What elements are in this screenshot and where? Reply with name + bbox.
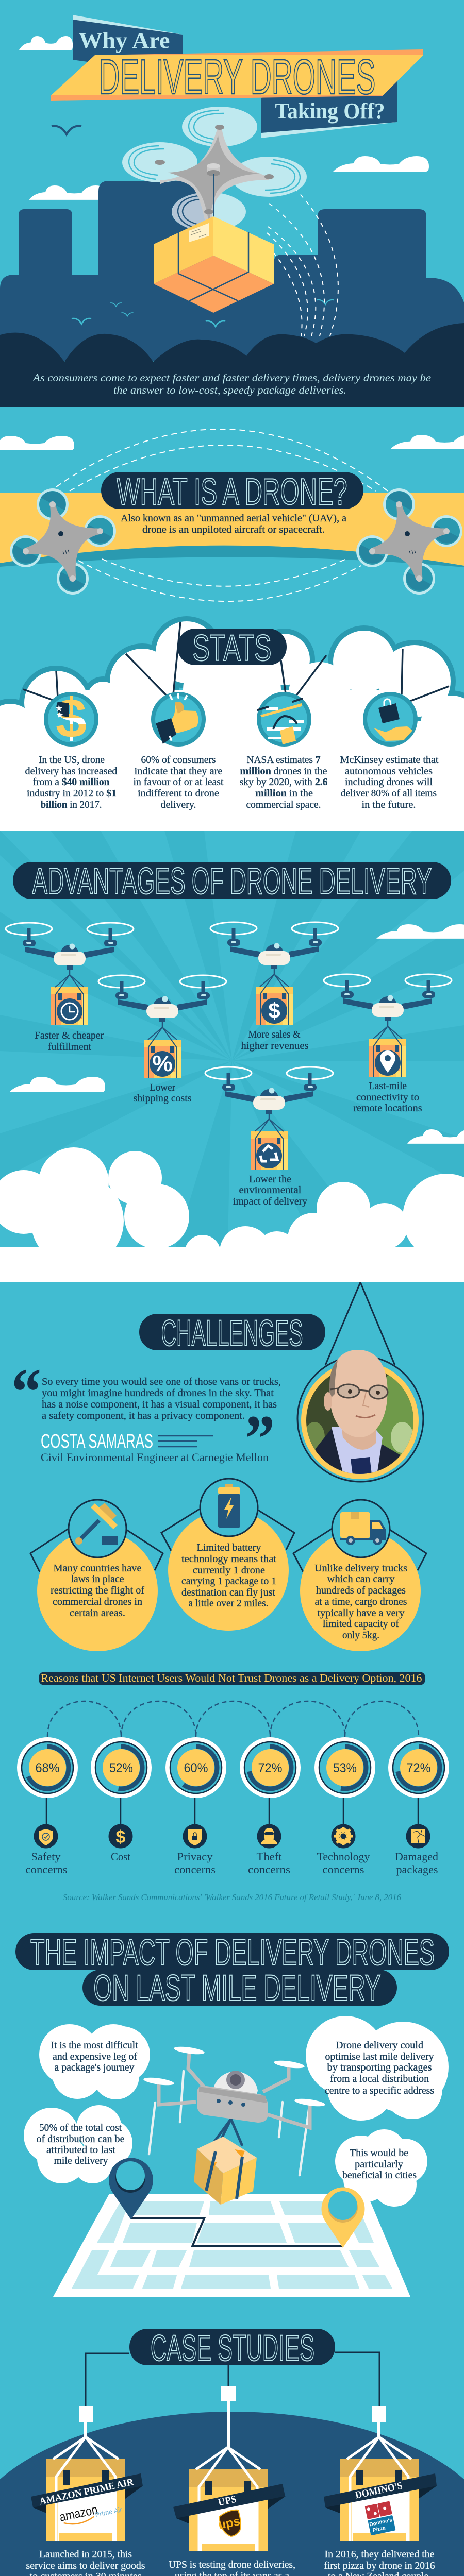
icon: hand with bag bbox=[363, 692, 418, 747]
text: stat 3 bbox=[239, 754, 328, 810]
challenge: laws: certain areas. bbox=[70, 1607, 125, 1619]
label: theft: Theft bbox=[257, 1850, 281, 1863]
text: stat 3: sky by 2020, with 2.6 bbox=[239, 776, 328, 788]
label: damaged bbox=[395, 1850, 438, 1876]
cloud bbox=[9, 1077, 105, 1092]
challenge: battery: Limited battery bbox=[197, 1542, 261, 1553]
birds bbox=[72, 300, 334, 327]
donut: cost 52% bbox=[91, 1737, 152, 1798]
text: stat 1 bbox=[25, 754, 118, 810]
icon: safety shield bbox=[34, 1824, 58, 1849]
text: stat 1: from a $40 million bbox=[33, 776, 109, 788]
case: dominos: DOMINO'S bbox=[354, 2480, 404, 2501]
challenge: laws: Many countries have bbox=[54, 1563, 142, 1574]
cloud bbox=[0, 436, 74, 450]
map bbox=[53, 2194, 410, 2297]
label: environmental bbox=[239, 1184, 302, 1196]
heading: WHAT IS A DRONE? bbox=[117, 471, 347, 513]
label: Lower bbox=[150, 1082, 175, 1093]
bubble: most difficult: and expensive leg of bbox=[53, 2051, 137, 2062]
challenge: payload: hundreds of packages bbox=[316, 1585, 406, 1596]
bubble: most difficult: It is the most difficult bbox=[51, 2040, 138, 2051]
icon: drone right bbox=[356, 488, 462, 595]
label: Lower the bbox=[249, 1174, 291, 1185]
portrait bbox=[297, 1282, 425, 1482]
bubble: most difficult bbox=[39, 2024, 150, 2099]
cloud bbox=[391, 435, 464, 449]
yellow band bbox=[0, 493, 464, 566]
definition text: Also known as an "unmanned aerial vehicle" (UAV), a bbox=[121, 513, 346, 524]
icon: drone left bbox=[10, 488, 116, 595]
challenge: battery: carrying 1 package to 1 bbox=[181, 1575, 276, 1587]
drone: lower shipping costs bbox=[98, 975, 226, 1078]
case: dominos bbox=[324, 2406, 437, 2541]
text: stat 4: autonomous vehicles bbox=[345, 766, 433, 777]
label bbox=[241, 1029, 309, 1052]
title banner: taking off bbox=[261, 81, 397, 138]
text: stat 3: commercial space. bbox=[246, 799, 321, 810]
case: amazon: AMAZON PRIME AIR bbox=[39, 2477, 135, 2507]
bubble: 50 percent: mile delivery bbox=[54, 2155, 108, 2166]
route bbox=[131, 2218, 343, 2246]
text: stat 1: billion in 2017. bbox=[40, 799, 102, 810]
text: ups bbox=[169, 2559, 295, 2576]
label: privacy: Privacy bbox=[177, 1850, 212, 1863]
quote: So every time you would see one of those vans or trucks, bbox=[42, 1376, 281, 1387]
heading bbox=[101, 471, 363, 513]
drone: delivery bbox=[143, 2045, 326, 2175]
definition text: drone is an unpiloted aircraft or spacecraft. bbox=[142, 524, 325, 535]
navy hills bbox=[0, 323, 464, 407]
logo: amazon prime air: amazon bbox=[58, 2502, 99, 2524]
label: theft bbox=[248, 1850, 290, 1876]
bubble: optimise: by transporting packages bbox=[327, 2062, 432, 2073]
panel: advantages of drone delivery bbox=[0, 831, 464, 1282]
text: stat 4: in the future. bbox=[362, 799, 416, 810]
donut: privacy 60%: 60% bbox=[184, 1761, 208, 1775]
cloud backdrop bbox=[0, 616, 464, 831]
panel: case studies bbox=[0, 2328, 464, 2576]
bubble: 50 percent: 50% of the total cost bbox=[39, 2122, 122, 2133]
icon: battery bbox=[218, 1484, 240, 1528]
bubble: optimise: optimise last mile delivery bbox=[325, 2051, 434, 2062]
donut: safety 68% bbox=[17, 1737, 78, 1798]
logo: amazon prime air bbox=[58, 2497, 123, 2527]
bubble: optimise bbox=[306, 2016, 449, 2121]
donut: cost 52%: 52% bbox=[109, 1761, 133, 1775]
text: stat 4: McKinsey estimate that bbox=[340, 754, 439, 766]
definition text bbox=[121, 513, 346, 535]
icon: damaged package bbox=[406, 1824, 430, 1849]
panel: stats bbox=[0, 616, 464, 831]
challenge: battery: currently 1 drone bbox=[193, 1565, 265, 1576]
icon: dollar: $ bbox=[56, 687, 87, 749]
icon: cost dollar: $ bbox=[116, 1827, 126, 1847]
challenge: payload: typically have a very bbox=[318, 1607, 404, 1619]
case: amazon bbox=[31, 2406, 143, 2541]
label: More sales & bbox=[248, 1029, 301, 1040]
drone rotors bbox=[122, 107, 307, 231]
stems bbox=[46, 1798, 418, 1825]
text: stat 4 bbox=[340, 754, 439, 810]
bubble: cities: particularly bbox=[355, 2159, 403, 2170]
label: higher revenues bbox=[241, 1040, 309, 1052]
package straps and box bbox=[194, 2119, 257, 2205]
donut: privacy 60% bbox=[165, 1737, 226, 1798]
city skyline bbox=[0, 181, 464, 361]
challenge: battery bbox=[161, 1479, 294, 1631]
bubble: cities bbox=[335, 2129, 427, 2207]
title banner: taking off: Taking Off? bbox=[275, 98, 385, 124]
icon: gavel bbox=[75, 1503, 118, 1545]
text: stat 2 bbox=[133, 754, 224, 810]
quote: you might imagine hundreds of drones in the sky. That bbox=[42, 1387, 274, 1399]
text: stat 4: including drones will bbox=[345, 776, 433, 788]
label bbox=[354, 1080, 422, 1114]
label: privacy bbox=[174, 1850, 216, 1876]
sunburst background bbox=[0, 831, 464, 1282]
heading: CASE STUDIES bbox=[151, 2328, 314, 2369]
text: stat 3: million in the bbox=[255, 788, 313, 799]
icon: theft mask bbox=[257, 1824, 281, 1849]
donut: theft 72% bbox=[240, 1737, 301, 1798]
heading: STATS bbox=[193, 628, 271, 669]
icon: privacy badge bbox=[183, 1824, 207, 1849]
bubble: 50 percent: attributed to last bbox=[46, 2144, 115, 2156]
text: stat 4: deliver 80% of all items bbox=[341, 788, 437, 799]
challenge: battery: a little over 2 miles. bbox=[189, 1598, 268, 1609]
challenge: payload: which can carry bbox=[327, 1573, 395, 1585]
icon: cost dollar bbox=[108, 1824, 133, 1849]
title banner: why are bbox=[73, 15, 183, 63]
challenge: laws: commercial drones in bbox=[53, 1596, 142, 1607]
label: theft: concerns bbox=[248, 1863, 290, 1876]
challenge: payload: at a time, cargo drones bbox=[314, 1596, 407, 1607]
challenge: laws: restricting the flight of bbox=[51, 1585, 144, 1596]
bubble: 50 percent bbox=[24, 2105, 132, 2183]
logo: dominos: Domino's bbox=[369, 2517, 393, 2528]
label: technology: concerns bbox=[323, 1863, 364, 1876]
text: stat 3: million drones in the bbox=[240, 766, 327, 777]
donut: technology 53%: 53% bbox=[333, 1761, 357, 1775]
logo: dominos bbox=[364, 2501, 395, 2535]
text: dominos: In 2016, they delivered the bbox=[325, 2549, 435, 2560]
challenge: payload: only 5kg. bbox=[342, 1630, 379, 1641]
heading: CHALLENGES bbox=[161, 1313, 303, 1354]
label: remote locations bbox=[354, 1103, 422, 1114]
connectors bbox=[86, 2352, 379, 2406]
source: Source: Walker Sands Communications' 'Walker Sands 2016 Future of Retail Study,' June 8, 2016 bbox=[63, 1892, 401, 1902]
label: shipping costs bbox=[133, 1093, 192, 1104]
logo: amazon prime air: Prime Air bbox=[94, 2505, 123, 2519]
challenge: payload: Unlike delivery trucks bbox=[314, 1563, 407, 1574]
label: cost: Cost bbox=[111, 1850, 130, 1863]
case: ups: UPS bbox=[217, 2494, 238, 2509]
text: ups: UPS is testing drone deliveries, bbox=[169, 2559, 295, 2570]
text: stat 2: delivery. bbox=[161, 799, 196, 810]
label: technology: Technology bbox=[317, 1850, 370, 1863]
dark dome bbox=[0, 2412, 464, 2576]
label bbox=[35, 1030, 104, 1053]
logo: ups bbox=[217, 2510, 241, 2536]
icon: thumbs up bbox=[151, 692, 206, 747]
heading bbox=[139, 1313, 325, 1354]
cloud bbox=[19, 36, 73, 50]
quote: a safety component, it has a privacy component. bbox=[42, 1410, 245, 1421]
text: stat 1: industry in 2012 to $1 bbox=[27, 788, 117, 799]
icon: technology gear bbox=[331, 1824, 356, 1849]
donut: theft 72%: 72% bbox=[258, 1761, 283, 1775]
dashed flight paths bbox=[56, 429, 388, 601]
title banner: why are: Why Are bbox=[78, 28, 170, 53]
label: safety: concerns bbox=[26, 1863, 67, 1876]
label: damaged: Damaged bbox=[395, 1850, 438, 1863]
speaker name: COSTA SAMARAS bbox=[41, 1431, 153, 1452]
logo: dominos: Pizza bbox=[372, 2525, 386, 2533]
challenge: laws: laws in place bbox=[71, 1573, 124, 1585]
icon: bird bbox=[52, 126, 81, 134]
quote: “ bbox=[11, 1355, 41, 1429]
logo: ups: ups bbox=[217, 2514, 241, 2532]
text: stat 2: indicate that they are bbox=[134, 766, 223, 777]
bubble: cities: This would be bbox=[350, 2147, 408, 2159]
panel: hero bbox=[0, 15, 464, 407]
label: technology bbox=[317, 1850, 370, 1876]
package box bbox=[154, 216, 274, 313]
challenge: battery: technology means that bbox=[181, 1553, 276, 1565]
text: stat 2: in favour of or at least bbox=[133, 776, 224, 788]
dashed connectors bbox=[47, 1701, 419, 1737]
challenge: payload bbox=[293, 1500, 426, 1651]
big white clouds bbox=[0, 1147, 464, 1282]
panel: impact on last mile delivery bbox=[15, 1933, 449, 2297]
label: damaged: packages bbox=[396, 1863, 438, 1876]
text: stat 1: In the US, drone bbox=[39, 754, 105, 766]
drone: more sales: $ bbox=[268, 998, 280, 1023]
label: privacy: concerns bbox=[174, 1863, 216, 1876]
text: amazon: Launched in 2015, this bbox=[39, 2549, 132, 2560]
panel: what is a drone bbox=[0, 429, 464, 601]
label: impact of delivery bbox=[233, 1196, 307, 1207]
text: stat 3: NASA estimates 7 bbox=[246, 754, 321, 766]
dashed flight trails bbox=[267, 170, 338, 336]
text: dominos: first pizza by drone in 2016 bbox=[324, 2560, 435, 2571]
label: safety: Safety bbox=[31, 1850, 61, 1863]
cloud bbox=[29, 185, 106, 200]
chart title: Reasons that US Internet Users Would Not Trust Drones as a Delivery Option, 2016 bbox=[41, 1672, 422, 1684]
label bbox=[233, 1174, 307, 1207]
drone: faster and cheaper bbox=[6, 923, 134, 1025]
bubble: cities: beneficial in cities bbox=[342, 2170, 417, 2181]
bubble: optimise: from a local distribution bbox=[330, 2073, 429, 2084]
label: safety bbox=[26, 1850, 67, 1876]
quote: has a noise component, it has a visual component, it has bbox=[42, 1399, 277, 1410]
text: dominos bbox=[324, 2549, 435, 2576]
label bbox=[133, 1082, 192, 1104]
intro text bbox=[32, 371, 431, 396]
label: Last-mile bbox=[369, 1080, 407, 1092]
drone: environmental impact bbox=[205, 1067, 333, 1170]
challenge: laws bbox=[30, 1500, 163, 1651]
pin: blue bbox=[109, 2158, 153, 2219]
drone: more sales bbox=[210, 922, 338, 1025]
drone: last mile connectivity bbox=[324, 974, 452, 1077]
drone body bbox=[155, 125, 274, 238]
quote: ” bbox=[245, 1402, 275, 1476]
bubble: optimise: Drone delivery could bbox=[336, 2040, 423, 2051]
panel: reasons chart bbox=[17, 1672, 449, 1902]
text: stat 2: indifferent to drone bbox=[138, 788, 219, 799]
teal band bbox=[0, 546, 464, 567]
cloud bbox=[376, 924, 464, 939]
speaker role: Civil Environmental Engineer at Carnegie Mellon bbox=[41, 1451, 269, 1464]
bubble: 50 percent: of distribution can be bbox=[36, 2133, 125, 2145]
bubble: optimise: centre to a specific address bbox=[325, 2085, 434, 2096]
text: stat 1: delivery has increased bbox=[25, 766, 118, 777]
donut: damaged 72% bbox=[388, 1737, 449, 1798]
challenge: payload: limited capacity of bbox=[323, 1618, 399, 1630]
intro text: the answer to low-cost, speedy package deliveries. bbox=[113, 384, 346, 396]
text: amazon bbox=[26, 2549, 145, 2576]
icon: truck bbox=[340, 1512, 386, 1545]
label: Faster & cheaper bbox=[35, 1030, 104, 1041]
quote bbox=[11, 1355, 281, 1476]
challenge: battery: destination can fly just bbox=[181, 1587, 275, 1598]
heading bbox=[15, 1933, 449, 2009]
donut: technology 53% bbox=[314, 1737, 375, 1798]
donut: safety 68%: 68% bbox=[35, 1761, 60, 1775]
label: connectivity to bbox=[356, 1092, 419, 1103]
drone: lower shipping costs: % bbox=[152, 1051, 173, 1076]
case: ups bbox=[173, 2386, 286, 2551]
panel: challenges bbox=[11, 1282, 426, 1651]
hanging strings bbox=[23, 622, 449, 701]
text: amazon: service aims to deliver goods bbox=[26, 2560, 145, 2571]
pin: yellow bbox=[322, 2188, 364, 2248]
cloud bbox=[407, 1129, 464, 1144]
bubble: most difficult: a package's journey bbox=[55, 2062, 134, 2073]
donut: damaged 72%: 72% bbox=[406, 1761, 431, 1775]
cloud bbox=[333, 156, 429, 172]
heading bbox=[129, 2328, 335, 2369]
text: stat 2: 60% of consumers bbox=[141, 754, 216, 766]
icon: drone in clouds bbox=[257, 692, 311, 747]
intro text: As consumers come to expect faster and faster delivery times, delivery drones may be bbox=[32, 371, 431, 384]
label: fulfillment bbox=[48, 1041, 91, 1053]
icon: dollar bbox=[44, 687, 98, 749]
